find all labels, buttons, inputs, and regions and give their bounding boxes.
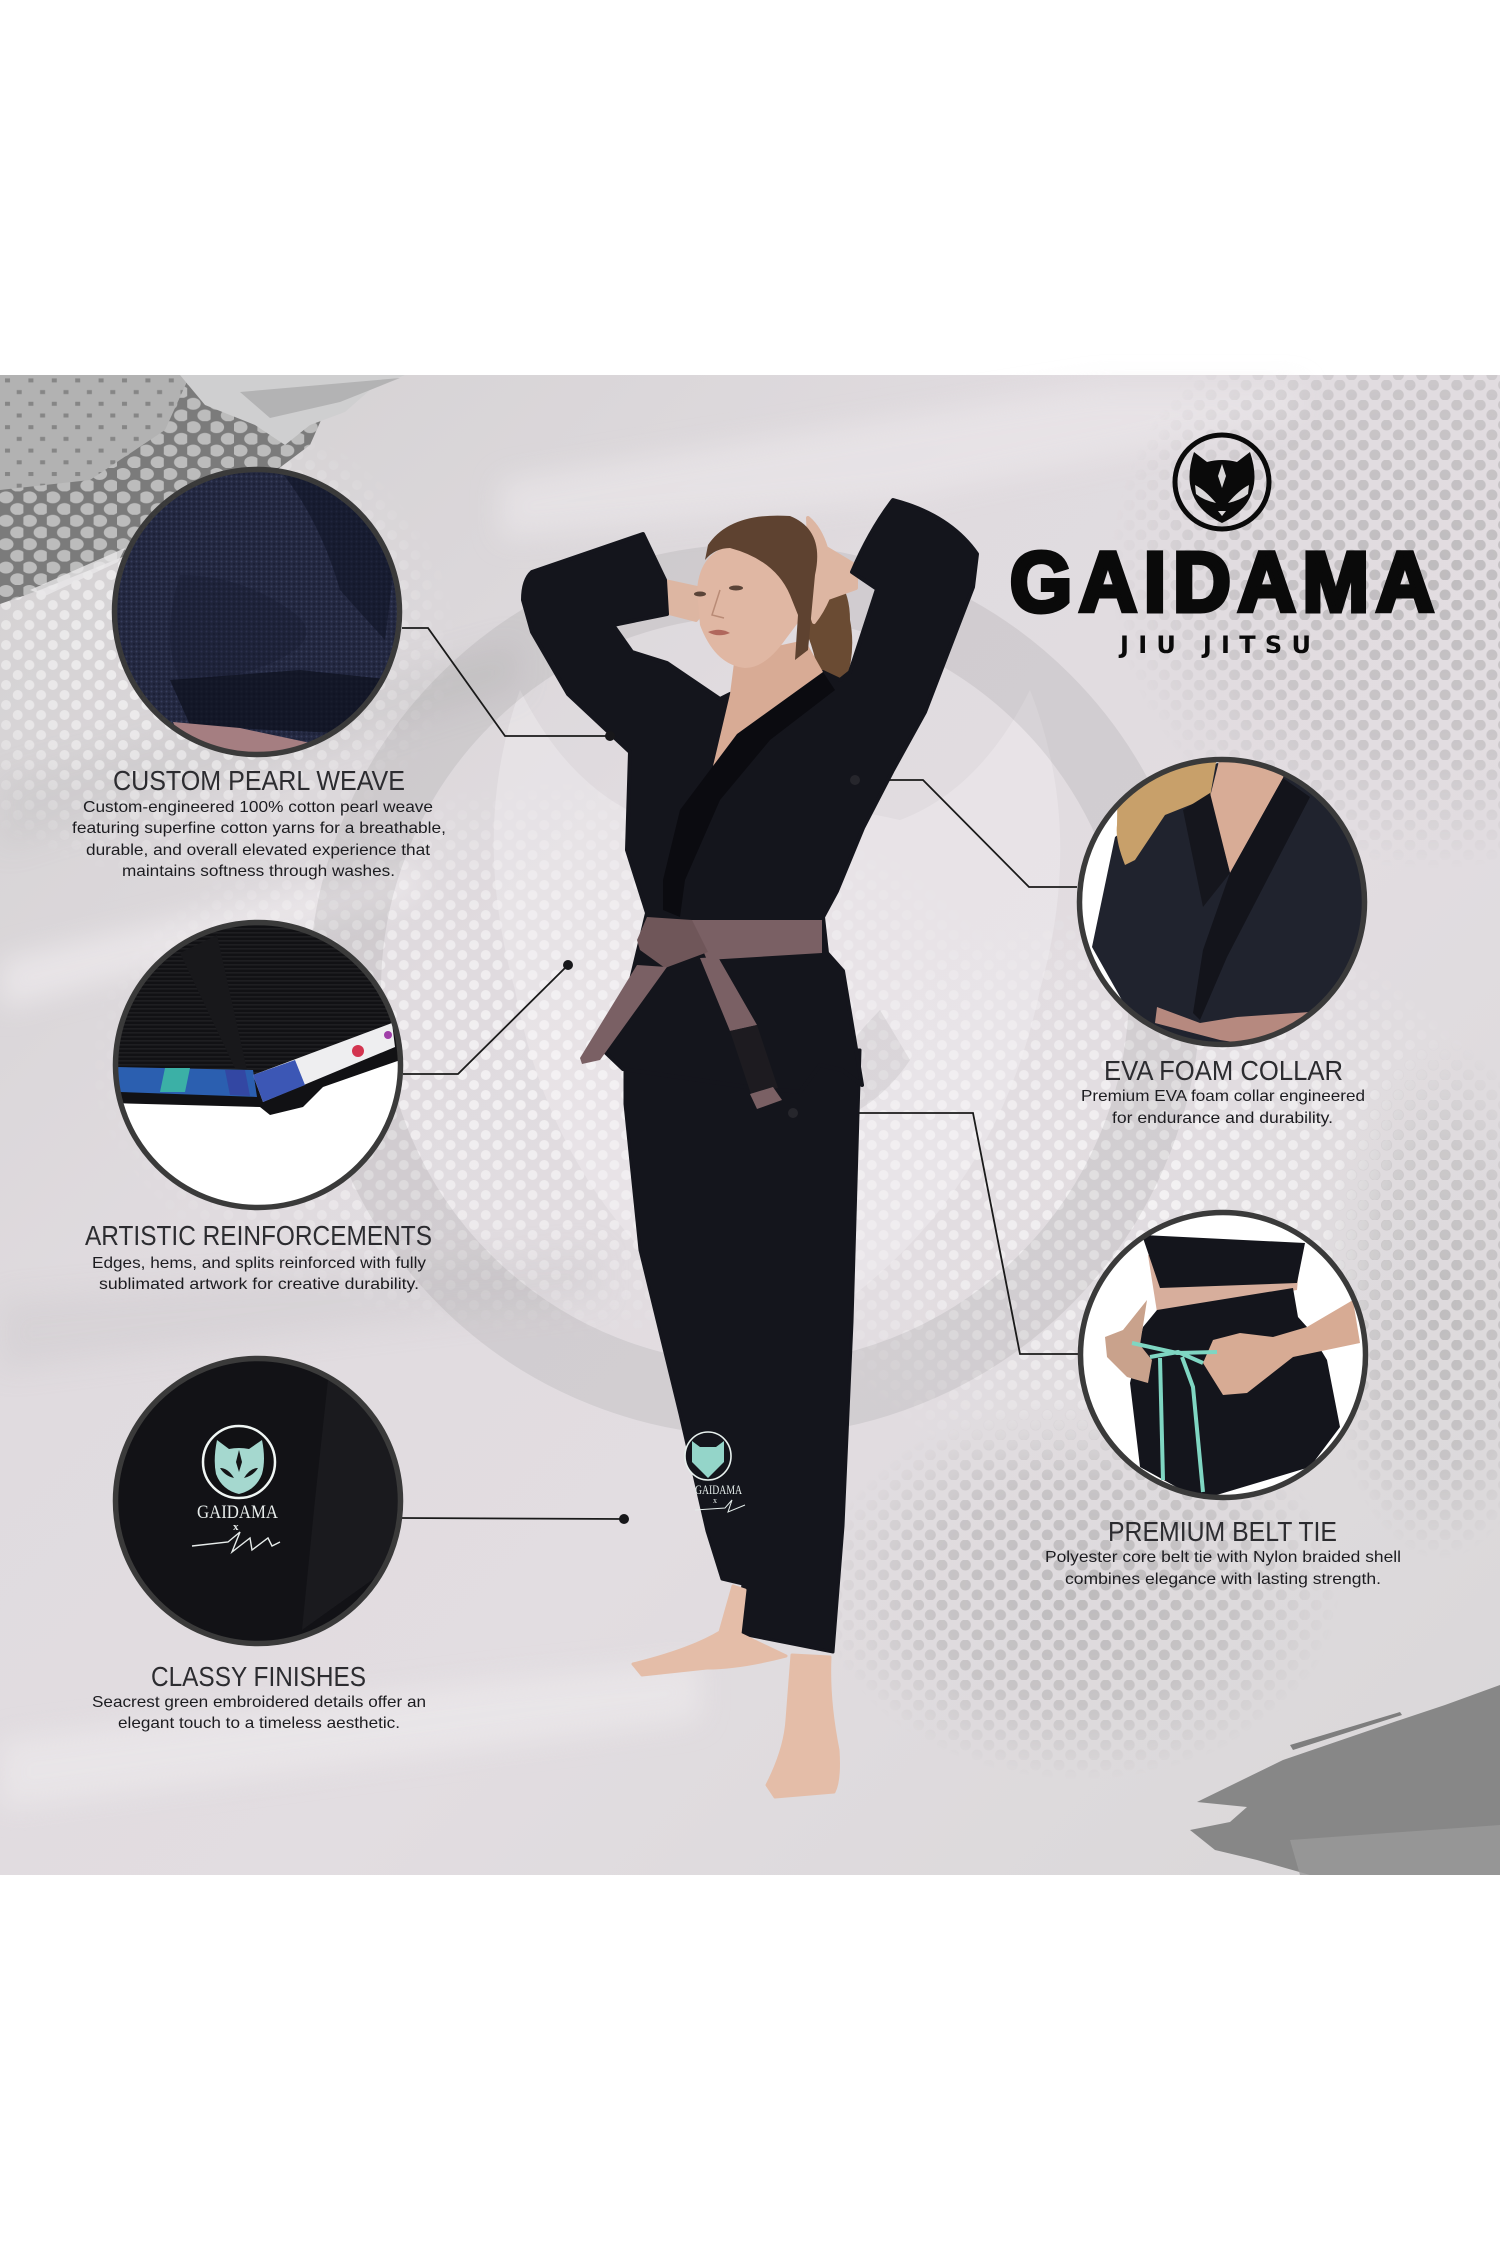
watermark: large fox emblem bbox=[345, 580, 1165, 1400]
line: artistic reinforcements bbox=[403, 965, 568, 1074]
photo: collar close-up bbox=[1082, 762, 1362, 1042]
description: Edges, hems, and splits reinforced with fully bbox=[92, 1255, 426, 1272]
description: durable, and overall elevated experience that bbox=[86, 842, 431, 859]
description: maintains softness through washes. bbox=[122, 863, 395, 880]
face features bbox=[694, 586, 743, 635]
heading: ARTISTIC REINFORCEMENTS bbox=[85, 1220, 432, 1251]
neck and chest skin bbox=[713, 640, 823, 766]
description: Premium EVA foam collar engineered bbox=[1081, 1088, 1365, 1105]
feet bbox=[633, 1586, 838, 1797]
heading: EVA FOAM COLLAR bbox=[1104, 1055, 1343, 1086]
panel: EVA foam collar bbox=[1075, 755, 1375, 1127]
panel: classy finishes bbox=[92, 1355, 426, 1732]
description bbox=[92, 1694, 426, 1732]
collar bbox=[663, 672, 835, 917]
description: featuring superfine cotton yarns for a breathable, bbox=[72, 820, 446, 837]
description: sublimated artwork for creative durability. bbox=[99, 1276, 419, 1293]
description bbox=[92, 1255, 426, 1293]
description: Custom-engineered 100% cotton pearl weave bbox=[83, 799, 433, 816]
pants emblem: x bbox=[713, 1496, 717, 1505]
heading: CLASSY FINISHES bbox=[151, 1661, 366, 1692]
photo: embroidered emblem: GAIDAMA bbox=[197, 1502, 278, 1523]
pants emblem bbox=[685, 1432, 745, 1512]
pants emblem: GAIDAMA bbox=[695, 1482, 742, 1497]
halftone dots bbox=[0, 375, 1500, 1875]
icon: fox emblem bbox=[1175, 435, 1269, 529]
photo: embroidered emblem: x bbox=[233, 1521, 239, 1533]
top-left brush patch bbox=[0, 375, 405, 604]
line: EVA collar bbox=[855, 780, 1077, 887]
line: classy finishes bbox=[402, 1518, 624, 1519]
gi pants bbox=[625, 1050, 860, 1652]
heading: PREMIUM BELT TIE bbox=[1108, 1516, 1337, 1547]
leader lines bbox=[402, 628, 1078, 1519]
panel: custom pearl weave bbox=[72, 465, 446, 880]
gi jacket bbox=[523, 500, 977, 1092]
description: combines elegance with lasting strength. bbox=[1065, 1571, 1381, 1588]
description bbox=[1081, 1088, 1365, 1127]
description: for endurance and durability. bbox=[1112, 1110, 1333, 1127]
logo wordmark: GAIDAMA bbox=[1010, 536, 1434, 629]
line: pearl weave bbox=[402, 628, 610, 736]
photo: navy fabric bbox=[117, 472, 397, 752]
belt bbox=[580, 917, 822, 1109]
hair bbox=[705, 516, 817, 660]
panel: premium belt tie bbox=[1045, 1205, 1401, 1588]
callout dots bbox=[563, 731, 860, 1524]
photo: sublimated hem bbox=[118, 925, 398, 1205]
person figure bbox=[523, 500, 977, 1797]
description: Polyester core belt tie with Nylon braided shell bbox=[1045, 1549, 1401, 1566]
logo bbox=[1010, 435, 1434, 659]
forearms and hands bbox=[660, 518, 856, 622]
head bbox=[697, 545, 800, 668]
photo: embroidered emblem bbox=[118, 1361, 398, 1641]
ponytail bbox=[800, 560, 852, 705]
heading: CUSTOM PEARL WEAVE bbox=[113, 765, 405, 796]
line: belt tie bbox=[793, 1113, 1078, 1354]
description bbox=[1045, 1549, 1401, 1588]
logo tagline: JIU JITSU bbox=[1118, 631, 1311, 659]
description: Seacrest green embroidered details offer an bbox=[92, 1694, 426, 1711]
photo: belt tie close-up bbox=[1083, 1215, 1363, 1495]
description bbox=[72, 799, 446, 880]
background band bbox=[0, 375, 1500, 1875]
bottom-right brush patch bbox=[1190, 1685, 1500, 1875]
panel: artistic reinforcements bbox=[85, 920, 432, 1293]
description: elegant touch to a timeless aesthetic. bbox=[118, 1715, 400, 1732]
